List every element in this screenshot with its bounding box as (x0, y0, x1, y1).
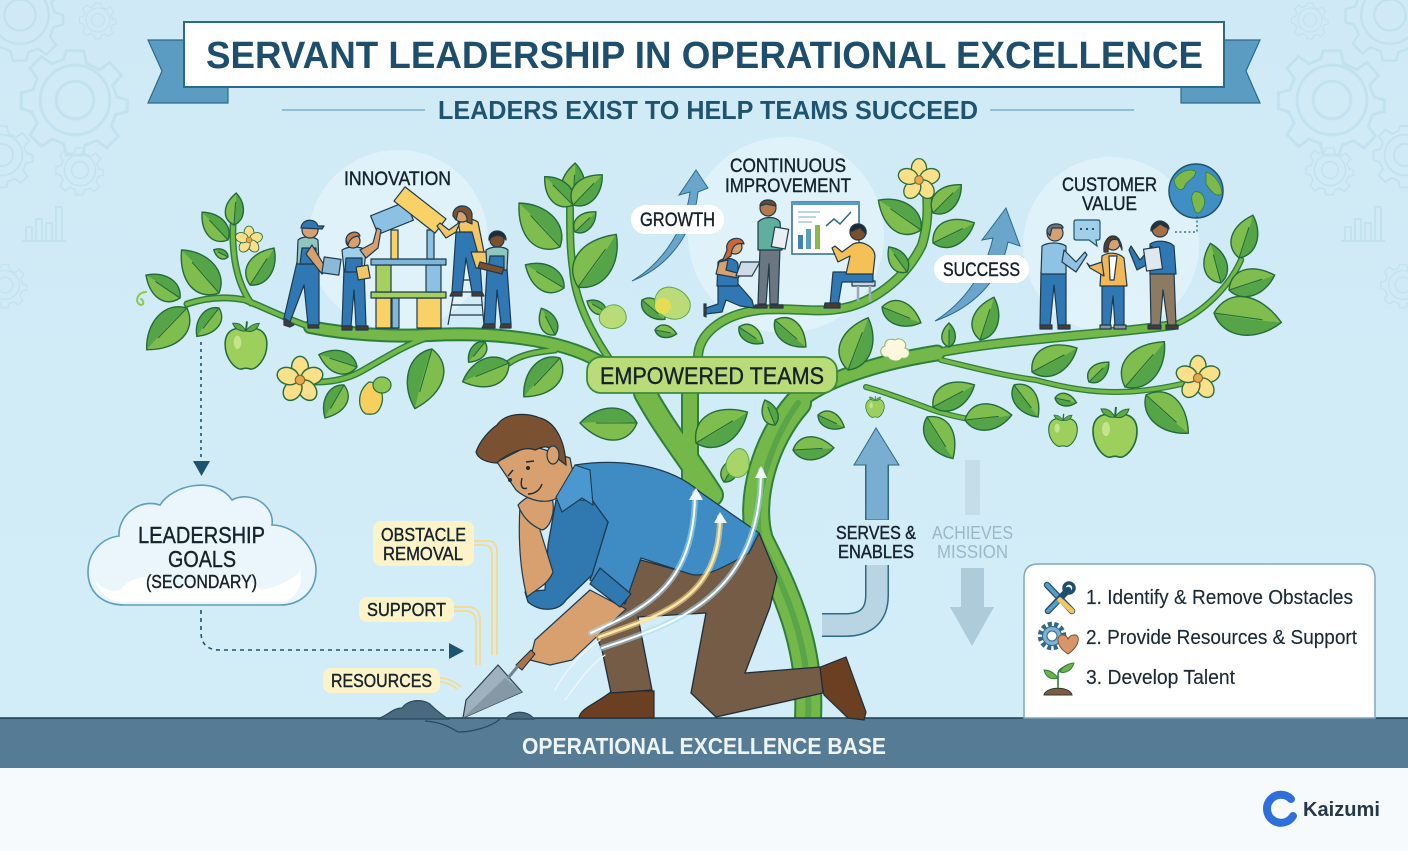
right ribbon (1181, 40, 1260, 103)
arrow: dashed goals down (193, 342, 210, 476)
list item two: 2. Provide Resources & Support (1086, 627, 1357, 649)
logo: kaizumi: Kaizumi (1303, 799, 1380, 821)
standing man (755, 200, 789, 308)
icon: tools (1047, 583, 1074, 611)
label: empowered teams: EMPOWERED TEAMS (600, 363, 824, 390)
banner box (184, 22, 1224, 87)
icon: gear and heart (1040, 624, 1078, 654)
speech bubble (1074, 220, 1100, 246)
hand at chin (518, 493, 553, 530)
stream arrowheads (689, 466, 767, 523)
worker on ladder (437, 206, 488, 325)
cloud: leadership goals (88, 485, 316, 605)
collar (556, 465, 593, 512)
subtitle: LEADERS EXIST TO HELP TEAMS SUCCEED (438, 95, 978, 125)
branch fills (187, 193, 1241, 718)
label: continuous improvement (725, 156, 851, 197)
arrow: success (935, 208, 1020, 321)
label: customer value (1062, 175, 1157, 215)
label: SERVES & (836, 523, 916, 543)
seated man (824, 224, 875, 308)
halo: continuous improvement (688, 137, 884, 333)
back shoe (818, 657, 866, 720)
branch outlines (187, 193, 1241, 718)
trowel (463, 650, 535, 718)
tree: flowers and fruit (225, 159, 1222, 477)
left ribbon (148, 40, 228, 103)
resource streams (555, 470, 761, 700)
block structure (371, 187, 446, 328)
halo: customer value (1023, 157, 1199, 333)
right trunk highlight (758, 403, 808, 718)
kneeling woman (704, 238, 760, 317)
label: success (934, 255, 1029, 283)
people: innovation team (284, 187, 511, 330)
raised arm sleeve (525, 500, 608, 609)
soil mounds (377, 701, 534, 732)
ear (547, 446, 559, 464)
front shoe (579, 691, 654, 718)
label: obstacle removal: REMOVAL (383, 544, 463, 564)
tree: trunks and branches (137, 193, 1241, 718)
base band (0, 718, 1408, 768)
label: continuous improvement: IMPROVEMENT (725, 176, 851, 197)
title banner (148, 22, 1260, 103)
arrow: achieves mission (faded) (932, 460, 1013, 646)
label: customer value: VALUE (1082, 194, 1137, 215)
label: obstacle removal: OBSTACLE (381, 525, 466, 545)
arrow: dashed goals to support (201, 610, 464, 659)
label: growth: GROWTH (640, 210, 715, 231)
raised forearm (519, 498, 553, 597)
trousers (591, 533, 823, 717)
sleeve cuff (590, 568, 631, 607)
label: support: SUPPORT (367, 600, 446, 620)
worker with cap (284, 220, 341, 328)
arrow: growth (632, 170, 708, 281)
tendril (137, 292, 146, 305)
panel: leader actions (1024, 564, 1375, 718)
label: resources (323, 668, 461, 693)
icon: seedling (1044, 663, 1074, 695)
label: success: SUCCESS (943, 260, 1020, 281)
label: customer value: CUSTOMER (1062, 175, 1157, 196)
cloud: leadership goals: LEADERSHIP (138, 522, 265, 548)
label: resources: RESOURCES (331, 671, 432, 691)
chart board (792, 202, 859, 254)
label: ACHIEVES (932, 523, 1013, 543)
list item one: 1. Identify & Remove Obstacles (1086, 587, 1353, 609)
background gears and chart motifs (0, 0, 1408, 308)
label: support (359, 597, 480, 665)
people: customer value team (1040, 164, 1223, 329)
tree: foliage (136, 162, 1284, 486)
worker four (478, 231, 511, 328)
lower forearm (530, 590, 626, 665)
label: growth (631, 205, 724, 234)
list item three: 3. Develop Talent (1086, 667, 1235, 689)
worker two (342, 228, 381, 330)
customer man with clipboard (1129, 221, 1178, 329)
cloud: leadership goals: (SECONDARY) (146, 572, 257, 592)
base label: OPERATIONAL EXCELLENCE BASE (522, 733, 886, 759)
cloud: leadership goals: GOALS (168, 546, 236, 572)
arrow: achieves mission (faded): MISSION (937, 542, 1008, 562)
arrow: serves and enables: ENABLES (838, 542, 914, 562)
label: innovation: INNOVATION (344, 169, 451, 190)
label: empowered teams (587, 357, 837, 393)
hair (476, 414, 566, 465)
people: continuous improvement team (704, 200, 875, 317)
halo: innovation (308, 150, 488, 330)
title: SERVANT LEADERSHIP IN OPERATIONAL EXCELLENCE (206, 35, 1203, 77)
arrow: serves and enables (822, 428, 922, 625)
label: obstacle removal (373, 521, 497, 655)
logo: kaizumi (1267, 795, 1380, 823)
customer woman (1087, 236, 1127, 329)
customer with headset (1040, 224, 1087, 329)
globe (1169, 164, 1223, 218)
head (497, 445, 576, 501)
torso shirt (575, 462, 759, 604)
label: continuous improvement: CONTINUOUS (730, 156, 846, 177)
servant leader figure (463, 414, 866, 720)
face details (508, 461, 542, 494)
footer strip (0, 768, 1408, 851)
